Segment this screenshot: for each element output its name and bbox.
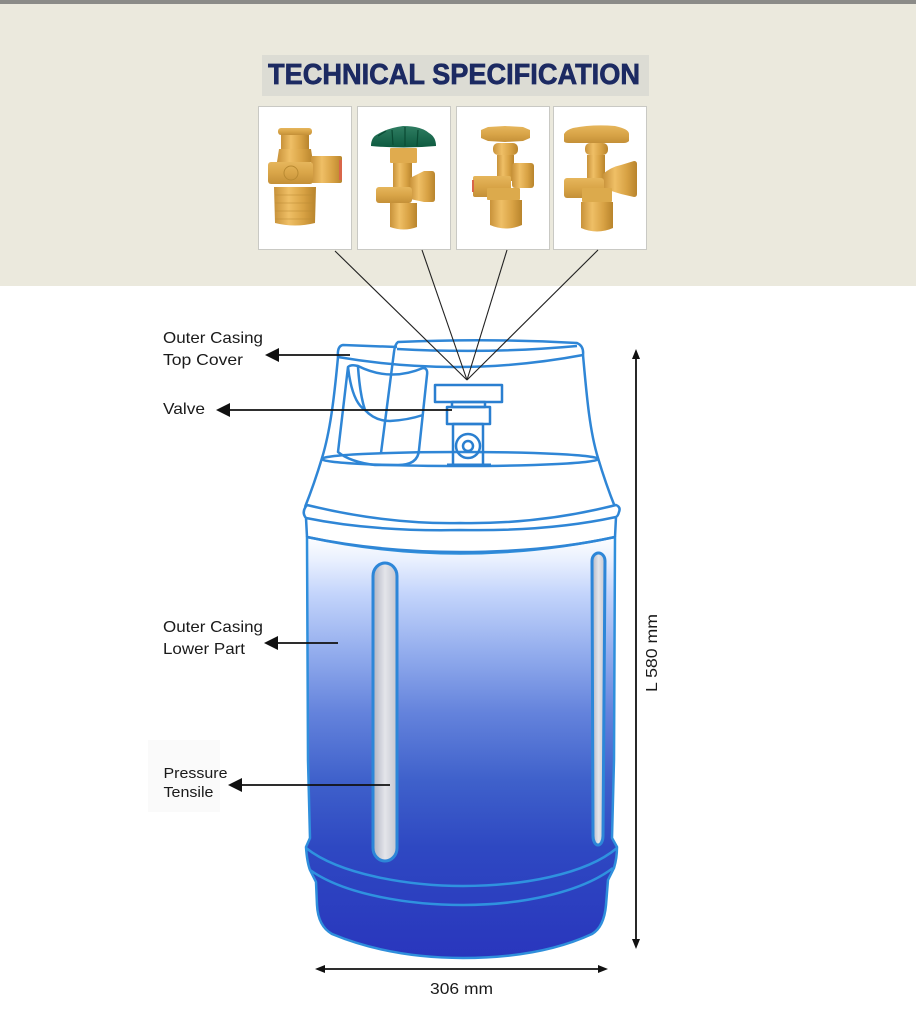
label: pressure tensile: Pressure bbox=[164, 765, 228, 782]
label: outer casing lower part: Lower Part bbox=[163, 641, 246, 658]
title: TECHNICAL SPECIFICATION bbox=[268, 59, 640, 91]
connector lines from valves bbox=[335, 250, 598, 380]
width dimension: 306 mm bbox=[430, 981, 493, 998]
width dimension bbox=[315, 965, 608, 998]
label: pressure tensile bbox=[148, 740, 390, 812]
label: outer casing lower part: Outer Casing bbox=[163, 619, 263, 636]
height dimension: L 580 mm bbox=[644, 614, 661, 692]
collar bbox=[304, 505, 620, 537]
valve outline bbox=[435, 385, 502, 465]
label: pressure tensile: Tensile bbox=[164, 784, 214, 801]
top cover bbox=[305, 340, 615, 507]
label: outer casing top cover: Outer Casing bbox=[163, 330, 263, 347]
label: outer casing lower part bbox=[163, 619, 338, 658]
label: outer casing top cover: Top Cover bbox=[163, 352, 244, 369]
label: valve: Valve bbox=[163, 401, 205, 418]
label: outer casing top cover bbox=[163, 330, 350, 369]
height dimension bbox=[632, 349, 661, 949]
handle pocket bbox=[338, 365, 427, 465]
valve card 2 bbox=[358, 106, 450, 250]
cylinder lower casing bbox=[306, 537, 617, 958]
label: valve bbox=[163, 401, 452, 418]
base rings bbox=[306, 848, 617, 905]
valve card 1 bbox=[258, 106, 352, 250]
left window slot bbox=[373, 563, 397, 861]
right window slot bbox=[592, 553, 605, 845]
valve card 3 bbox=[456, 106, 550, 250]
header band bbox=[0, 0, 916, 286]
gas cylinder bbox=[304, 340, 620, 958]
valve card 4 bbox=[554, 106, 646, 250]
